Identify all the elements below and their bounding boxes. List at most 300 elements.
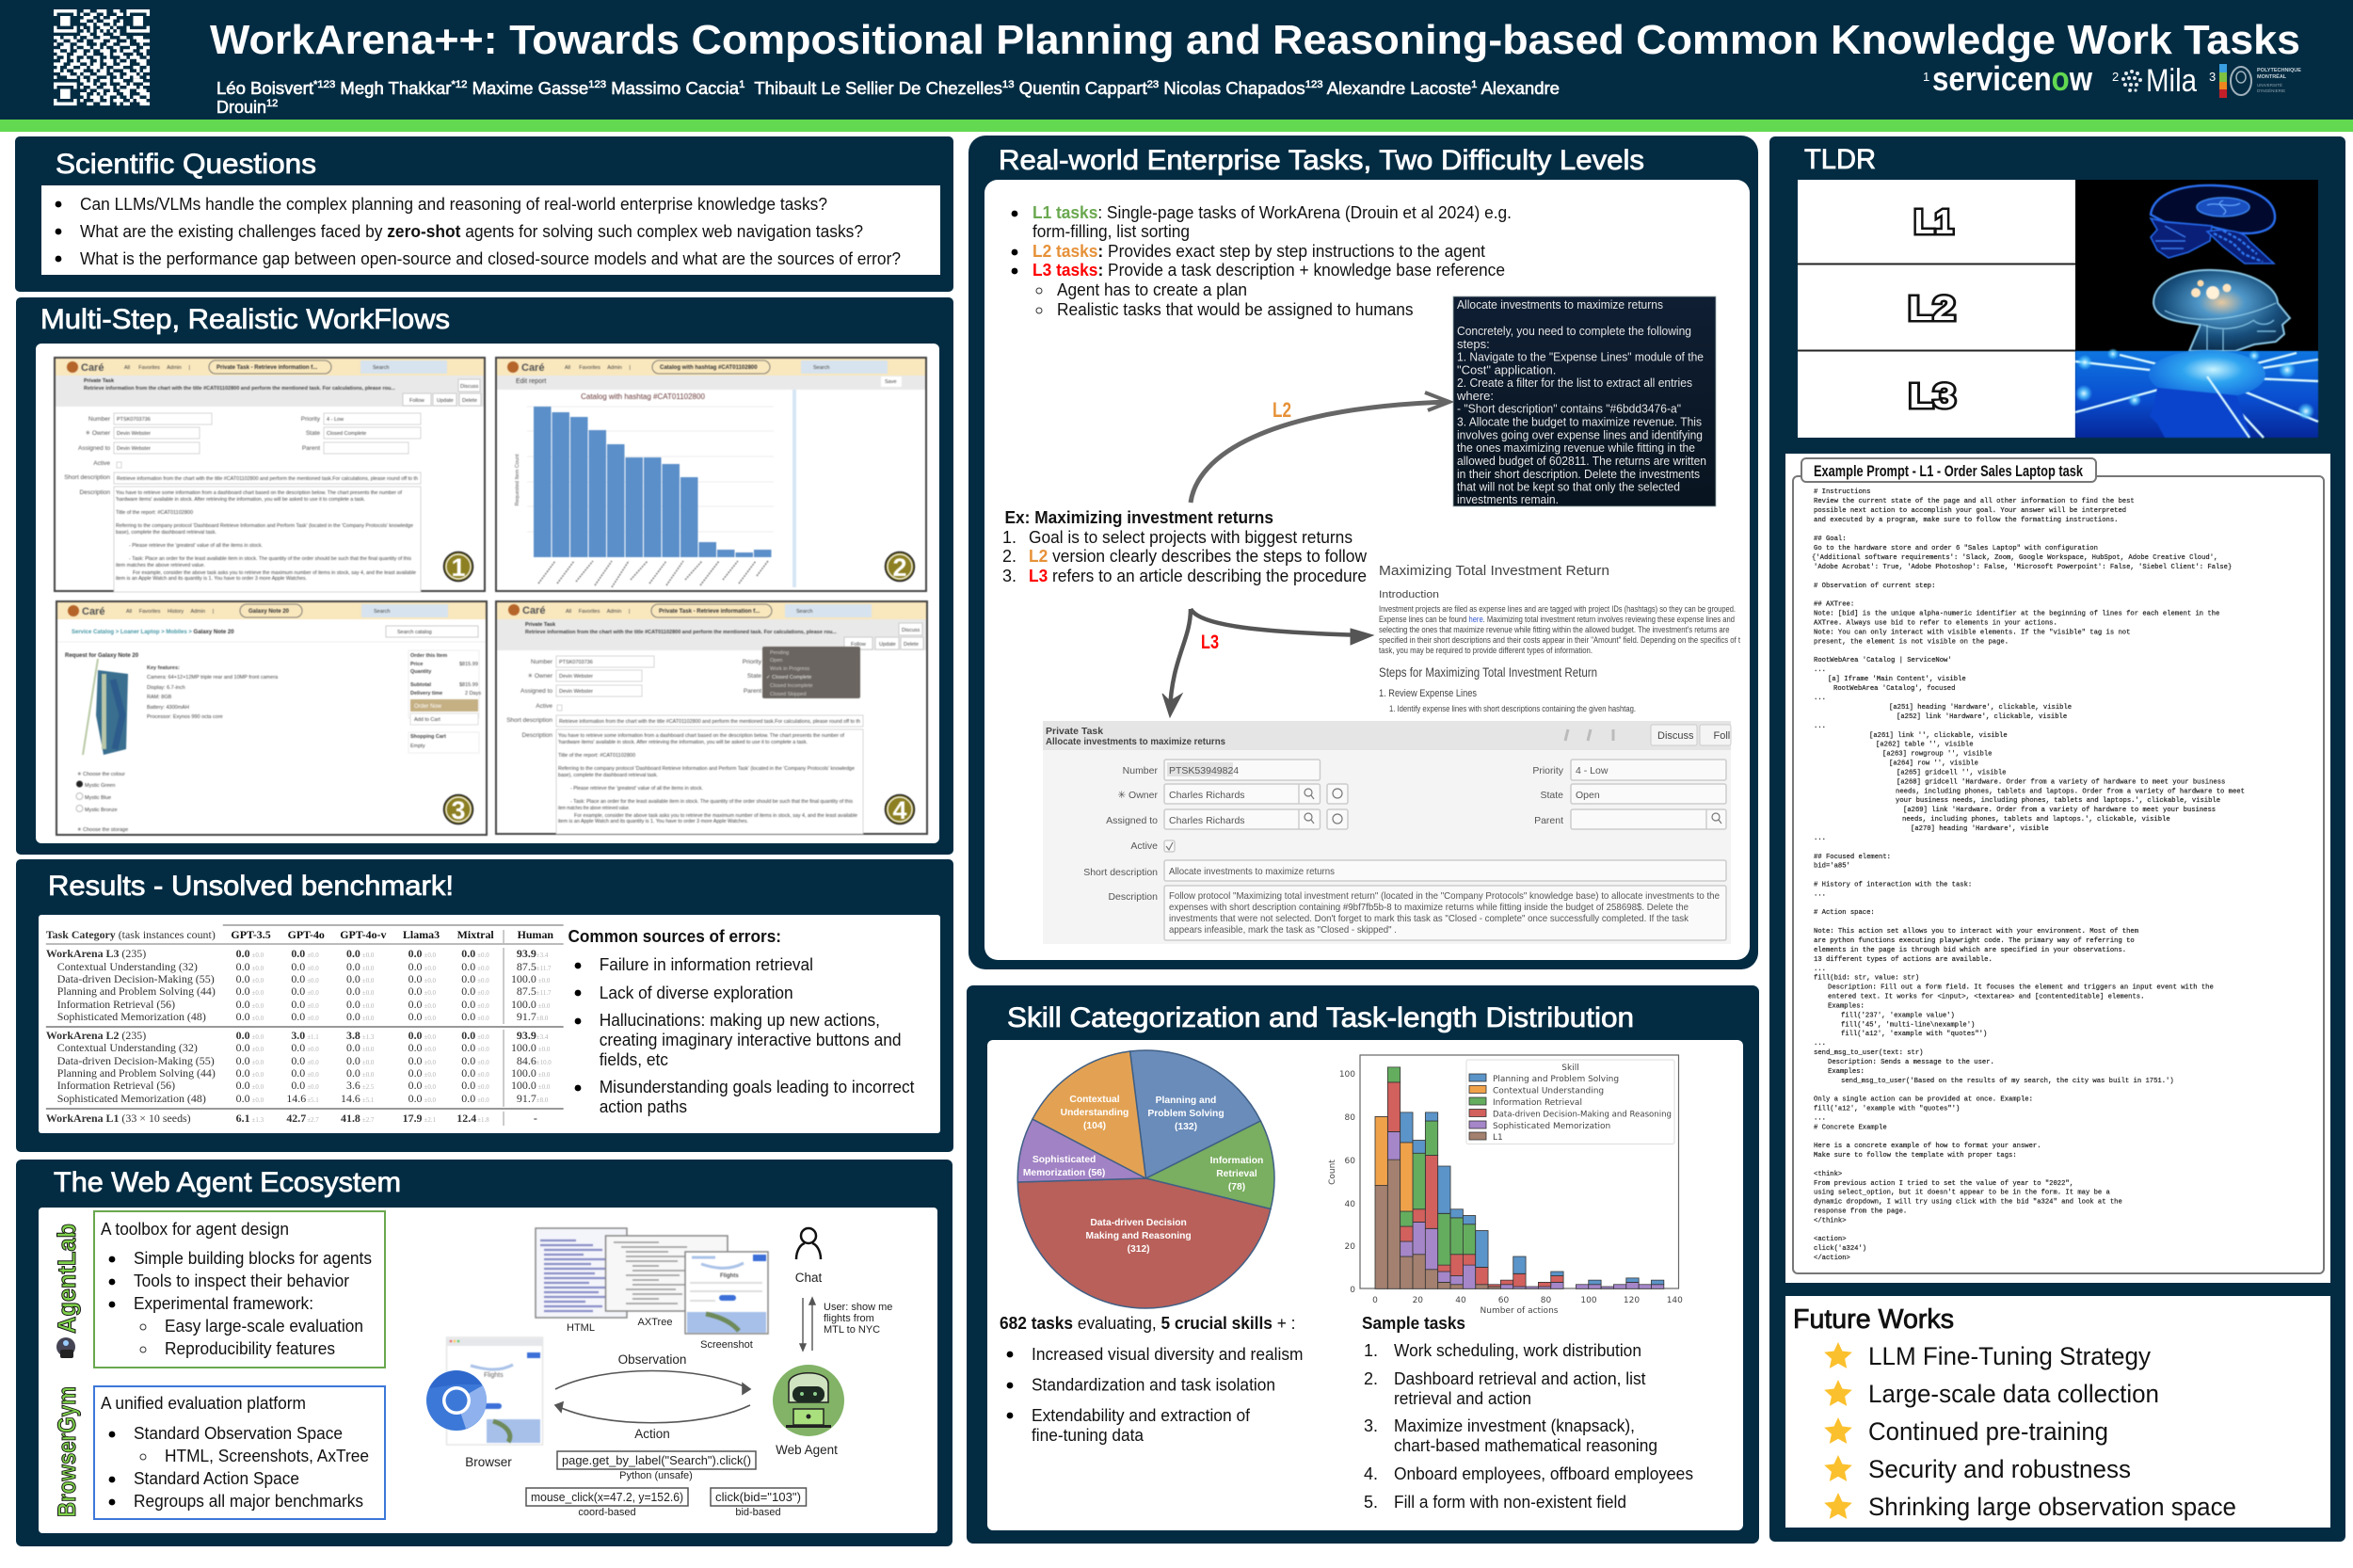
screenshot 4: state dropdown: Devin Webster [559,689,593,695]
results table: 0.0 [236,960,250,973]
results table: ±2.7 [362,1116,375,1124]
screenshot 4: state dropdown: Assigned to [520,688,552,695]
authors: Nicolas Chapados [1159,79,1305,98]
knowledge base article [1379,563,1740,713]
results table: ±0.0 [252,1002,264,1010]
results table: Data-driven Decision-Making (55) [57,1054,215,1067]
results table: 0.0 [291,1041,305,1054]
knowledge base article: Maximizing Total Investment Return [1379,563,1609,579]
diagram: agent environment loop: User: show me [824,1302,892,1313]
authors: 123 [588,79,606,90]
knowledge base article: Steps for Maximizing Total Investment Return [1379,664,1597,680]
legend: Information Retrieval [1493,1098,1582,1108]
prompt text: fill('a12', 'example with "quotes"') [1841,1031,1987,1038]
prompt text: send_msg_to_user(text: str) [1814,1049,1923,1057]
screenshot 4: state dropdown: - Please retrieve the 'greatest' value of all the items in stock. [570,786,703,792]
histogram: 120 [1624,1296,1640,1305]
question list: What are the existing challenges faced by zero-shot agents for solving such complex web navigation tasks? [80,222,863,241]
authors: Léo Boisvert [216,79,311,98]
screenshot 3: product catalog: Mystic Blue [85,795,111,801]
box: browsergym platform: Standard Action Space [134,1469,299,1488]
prompt text: ... [1814,1114,1826,1122]
histogram: 100 [1339,1070,1355,1080]
screenshot 1: private task form: Devin Webster [117,431,151,437]
results table: ±8.0 [536,1015,549,1022]
results table: 0.0 [236,1054,250,1067]
arrow: action [555,1402,750,1423]
affiliation logos: 1 [1923,70,1929,84]
future works box [1785,1296,2330,1528]
screenshot 4: state dropdown: Active [536,703,552,710]
affiliation logos: POLYTECHNIQUE [2257,68,2301,73]
results table: ±0.0 [307,1015,319,1022]
prompt text: fill('45', 'multi-line\nexample') [1841,1022,1975,1030]
results table: 3.8 [346,1029,360,1042]
example task text: 3. [1002,567,1016,585]
results table: 0.0 [461,960,475,973]
results table: ±0.0 [307,1046,319,1053]
results table: 0.0 [291,1010,305,1023]
screenshot 2: bar chart report: Save [885,379,897,385]
results table: ±0.0 [252,965,264,972]
screenshot 4: state dropdown: item matches the above retrieved value. [558,806,630,811]
icon: chrome logo [426,1370,487,1431]
results table [46,925,564,1126]
results table: Sophisticated Memorization (48) [57,1010,206,1023]
task level list: L2 tasks: Provides exact step by step instructions to the agent [1032,242,1485,261]
results table: 87.5 [517,960,536,973]
servicenow form screenshot: PTSK53949824 [1169,765,1239,776]
affiliation logos [1923,59,2301,99]
results table: ±0.0 [362,977,375,984]
results table: ±1.3 [362,1033,375,1041]
title: WorkArena++: Towards Compositional Planning and Reasoning-based Common Knowledge Work Tasks [210,17,2300,63]
servicenow form screenshot: Follow protocol "Maximizing total investment return" (located in the "Company Protocols" knowledge base) to allocate investments to the [1169,890,1720,902]
results table: Human [518,928,553,941]
galaxy brain meme: L2 [1909,289,1956,328]
results table: ±0.0 [477,1002,489,1010]
example task text: Ex: Maximizing investment returns [1005,508,1273,527]
legend: L1 [1493,1133,1503,1143]
prompt text: and executed by a program, make sure to follow the formatting instructions. [1814,517,2118,524]
example task text: Goal is to select projects with biggest returns [1029,528,1353,547]
servicenow form screenshot: expenses with short description containing #9bf7fb5b-8 to maximize returns while fitting inside the budget of 258698$. Delete the [1169,902,1689,913]
results table: ±0.0 [477,1046,489,1053]
authors: 13 [1002,79,1015,90]
brain L2 [2153,270,2290,351]
results table: 0.0 [291,960,305,973]
sample tasks: 2. [1364,1369,1378,1388]
results table: ±0.0 [307,1059,319,1066]
screenshot 2: bar chart report: Catalog with hashtag #CAT01102800 [660,365,758,371]
results table: ±0.0 [252,1015,264,1022]
L2 instruction box: investments remain. [1457,492,1559,506]
future works box: Large-scale data collection [1868,1380,2159,1408]
screenshot 3: product catalog: Quantity [410,669,432,675]
authors [216,79,1560,117]
servicenow form screenshot: Description [1108,891,1158,903]
screenshot 1: private task form: item matches the above retrieved value. [116,563,205,568]
future works box: Security and robustness [1868,1455,2131,1483]
results table: ±0.0 [477,1096,489,1104]
prompt text: fill('237', 'example value') [1841,1013,1955,1020]
screenshot 1: private task form: Assigned to [78,445,110,452]
screenshot 1: private task form: 4 - Low [327,417,344,423]
screenshot 3: product catalog: Order this Item [410,653,447,659]
screenshot 1: private task form: For example, consider the above task asks you to retrieve the maximum number of items in stock, say 4, and the least available [133,570,416,576]
results table: ±0.0 [362,1015,375,1022]
results table: 0.0 [236,1029,250,1042]
screenshot 3: product catalog: Key features: [147,665,180,671]
results table: ±0.0 [362,989,375,997]
results table: ±0.0 [362,965,375,972]
diagram: agent environment loop: Action [634,1427,670,1441]
results table: 3.6 [346,1079,360,1092]
screenshot 4: state dropdown: Devin Webster [559,674,593,680]
histogram: 140 [1667,1296,1683,1305]
prompt text: possible next action to accomplish your goal. Your answer will be interpreted [1814,507,2126,515]
code: bid action [711,1488,806,1506]
servicenow form screenshot: Open [1576,790,1600,801]
results table: 0.0 [461,1041,475,1054]
diagram: agent environment loop: Python (unsafe) [619,1470,693,1481]
results table: Llama3 [403,928,440,941]
results table: 0.0 [408,1041,423,1054]
sample tasks: Fill a form with non-existent field [1394,1493,1626,1512]
results table: ±0.0 [424,1059,437,1066]
browser window: Flights [484,1372,504,1379]
prompt text: ... [1814,695,1826,702]
authors: Drouin [216,98,266,117]
prompt text: dynamic dropdown, I will try using click with the bid "a324" and look at the [1814,1199,2122,1207]
screenshot 3: product catalog: Caré [82,606,104,617]
logo: AgentLab: AgentLab [53,1224,81,1334]
prompt text: ## Goal: [1814,536,1847,543]
brain L1 [2151,185,2275,264]
results table: ±2.5 [362,1083,375,1091]
screenshot 1: private task form: Description [79,489,110,496]
results table: ±0.0 [424,965,437,972]
results table: ±0.0 [307,1071,319,1079]
pie chart: Understanding [1061,1108,1128,1118]
screenshot 1: private task form: Active [93,460,110,467]
prompt text: response from the page. [1814,1208,1907,1216]
L2 instruction box: Concretely, you need to complete the following [1457,324,1691,338]
results table: 0.0 [236,1092,250,1105]
box: agentlab toolbox: A toolbox for agent design [101,1220,289,1239]
prompt text: # Instructions [1814,488,1870,496]
screenshot 1: private task form: PTSK0703736 [117,417,151,423]
future works box: Future Works [1793,1304,1954,1335]
heading: Scientific Questions [56,149,316,180]
results table: ±11.7 [536,965,552,972]
prompt text: [a263] rowgroup '', visible [1882,751,1992,759]
prompt text: Make sure to follow the template with proper tags: [1814,1152,2017,1160]
pie chart: (104) [1083,1121,1106,1131]
results table: 0.0 [346,972,360,985]
screenshot 3: product catalog: Request for Galaxy Note 20 [65,653,139,659]
heading: Results - Unsolved benchmark! [48,871,454,902]
prompt text: Description: Sends a message to the user. [1828,1059,1994,1066]
arrow: chat exchange [800,1298,815,1351]
prompt text: [a265] gridcell '', visible [1897,770,2006,777]
results table: 84.6 [517,1054,536,1067]
results table: Contextual Understanding (32) [57,1041,198,1054]
servicenow form screenshot: Private Task [1046,726,1103,737]
results table: ±0.0 [477,1015,489,1022]
results table: ±0.0 [362,952,375,959]
header banner [0,0,2353,132]
screenshot 4: state dropdown: Short description [506,717,552,724]
screenshot 4: state dropdown: 'hardware items' available in stock. After retrieving the information, you will be asked to use it to complete a task. [558,740,808,745]
sample tasks: 3. [1364,1416,1378,1435]
histogram [1328,1055,1683,1316]
pie chart: Sophisticated [1032,1155,1096,1165]
panel: real-world enterprise tasks [968,136,1758,969]
results table: ±0.0 [477,977,489,984]
screenshot 1: private task form: Priority [301,416,321,423]
question list: Can LLMs/VLMs handle the complex planning and reasoning of real-world enterprise knowledge tasks? [80,195,827,214]
prompt text: ## Focused element: [1814,854,1891,861]
screenshot 1: private task form: Number [88,416,111,423]
results table: ±0.0 [307,952,319,959]
results table: 41.8 [341,1112,360,1125]
screenshot 3: product catalog: Battery: 4300mAH [147,705,189,711]
results table: 0.0 [236,1010,250,1023]
results table: Task Category (task instances count) [46,928,216,941]
results table: 0.0 [461,1010,475,1023]
L2 instruction box: 2. Create a filter for the list to extract all entries [1457,376,1692,390]
results table: 0.0 [408,947,423,960]
prompt text: 13 different types of actions are available. [1814,956,1993,964]
QR code [54,11,150,104]
sample tasks: 4. [1364,1464,1378,1483]
results table: ±1.3 [252,1116,264,1124]
prompt text: # Observation of current step: [1814,583,1935,590]
example prompt box [1785,454,2330,1283]
screenshot 2: bar chart report: Caré [521,362,544,374]
screenshot 3: product catalog: ✳ Choose the storage [77,826,128,833]
histogram: 40 [1455,1296,1466,1305]
code: python action: page.get_by_label("Search").click() [562,1453,751,1467]
results table: ±2.1 [424,1116,437,1124]
prompt text: [a270] heading 'Hardware', visible [1911,825,2049,833]
results table: ±0.0 [307,965,319,972]
prompt text: Examples: [1828,1068,1865,1076]
screenshot 2: bar chart report: Requested Item Count [515,454,520,506]
state dropdown: Closed Skipped [770,692,807,697]
results table: 0.0 [291,947,305,960]
observation documents: Flights [720,1273,739,1279]
icon: chat user [796,1228,821,1259]
state dropdown: Work in Progress [770,666,809,672]
prompt text: [a252] link 'Hardware', clickable, visible [1897,713,2067,721]
results table: 87.5 [517,984,536,998]
box: agentlab toolbox: Easy large-scale evaluation [165,1317,363,1336]
state dropdown: Open [770,658,782,664]
histogram: 0 [1372,1296,1378,1305]
L2 instruction box: - "Short description" contains "#6bdd3476-a" [1457,401,1681,416]
screenshot 3: product catalog: Empty [410,744,425,749]
results table: ±5.1 [307,1096,319,1104]
heading: Multi-Step, Realistic WorkFlows [40,304,450,335]
step badge 3: 3 [451,796,466,824]
legend: Contextual Understanding [1493,1086,1604,1096]
common sources of errors: Hallucinations: making up new actions, [600,1011,880,1030]
screenshot 3: product catalog [56,601,487,835]
prompt text: ## AXTree: [1814,600,1854,608]
results table: 0.0 [408,1029,423,1042]
screenshot 3: product catalog: Shopping Cart [410,734,446,740]
box: browsergym platform: Standard Observation Space [134,1424,343,1443]
diagram: agent environment loop: AXTree [638,1317,672,1328]
diagram: agent environment loop: HTML [567,1322,595,1334]
prompt text: {'Additional software requirements': 'Slack, Zoom, Google Workspace, HubSpot, Adobe Creative Cloud', [1812,554,2217,562]
pie chart: Retrieval [1216,1169,1257,1179]
prompt text: entered text. It works for <input>, <textarea> and [contenteditable] elements. [1828,994,2144,1001]
results table: 6.1 [236,1112,250,1125]
results table: 14.6 [286,1092,306,1105]
results table: ±1.8 [477,1116,489,1124]
screenshot 1: private task form: Retrieve information from the chart with the title #CAT01102800 and perform the mentioned task. For calculations, please rou... [84,386,395,392]
prompt text: </think> [1814,1218,1847,1225]
servicenow form screenshot: Foll [1713,730,1730,742]
step badge 4: 4 [892,796,907,824]
results table: ±0.0 [362,1071,375,1079]
legend: Planning and Problem Solving [1493,1075,1619,1084]
authors: Thibault Le Sellier De Chezelles [744,79,1002,98]
example task text [1002,508,1368,585]
screenshot 4: state dropdown [496,601,927,834]
prompt text: ... [1814,723,1826,730]
prompt text: are python functions executing playwright code. The primary way of referring to [1814,937,2135,945]
servicenow form screenshot: Active [1130,840,1158,852]
results table: ±0.0 [538,1083,551,1091]
results table: 14.6 [341,1092,360,1105]
screenshot 4: state dropdown: Parent [744,688,761,695]
histogram: 40 [1345,1200,1355,1209]
box: agentlab toolbox: Simple building blocks for agents [134,1249,372,1268]
results table: 0.0 [408,1092,423,1105]
results table: 0.0 [346,1010,360,1023]
screenshot 3: product catalog: Display: 6.7-inch [147,685,185,691]
results table: - [534,1112,537,1125]
prompt text: 'Adobe Acrobat': True, 'Adobe Photoshop': False, 'Microsoft Powerpoint': False, 'Siebel Client': False} [1814,564,2232,571]
results table: 91.7 [517,1010,536,1023]
results table: WorkArena L2 (235) [46,1029,146,1042]
star list [1824,1342,1852,1519]
results table: 0.0 [291,984,305,998]
arrow: L2 [1191,392,1449,503]
sample tasks: Maximize investment (knapsack), [1394,1416,1635,1435]
prompt text: [a261] link '', clickable, visible [1869,732,2008,740]
diagram: agent environment loop: coord-based [578,1507,636,1518]
heading: Real-world Enterprise Tasks, Two Difficulty Levels [999,145,1644,176]
knowledge base article: specified in their short descriptions and their costs appear in their "Amount" field. Depending on the specifics of t [1379,635,1740,645]
screenshot 4: state dropdown: All Favorites Admin | [566,609,630,615]
prompt text: send_msg_to_user('Based on the results of my search, the city was built in 1751.') [1841,1078,2174,1085]
galaxy brain meme: L3 [1909,376,1956,415]
results table: 0.0 [291,972,305,985]
affiliation logos: servicenow [1932,59,2093,98]
screenshot 4: state dropdown: Delete [904,642,919,648]
pie chart: Information [1210,1156,1263,1166]
prompt text: using select_option, but it doesn't appear to be in the form. It may be a [1814,1190,2111,1197]
sample tasks: 1. [1364,1341,1378,1360]
results table: Information Retrieval (56) [57,998,175,1011]
prompt text: [a262] table '', visible [1876,742,1974,749]
common sources of errors [568,927,915,1116]
legend: Sophisticated Memorization [1493,1122,1610,1131]
results table: 0.0 [236,998,250,1011]
knowledge base article: 1. Review Expense Lines [1379,688,1477,699]
prompt text: Note: [bid] is the unique alpha-numeric identifier at the beginning of lines for each element in the [1814,610,2219,617]
pie chart: (312) [1128,1244,1150,1255]
screenshot 4: state dropdown: item is an Apple Watch and its quantity is 1. You have to order 3 more Apple Watches. [558,819,748,824]
results table: ±5.1 [362,1096,375,1104]
results table: 0.0 [346,984,360,998]
screenshot 1: private task form: Private Task - Retrieve information f... [216,365,318,371]
authors: Maxime Gasse [467,79,588,98]
example task text: L3 refers to an article describing the procedure [1029,567,1367,585]
L2 instruction box: 3. Allocate the budget to maximize revenue. This [1457,414,1702,429]
results table: ±0.0 [307,1002,319,1010]
code: coordinate action: mouse_click(x=47.2, y=152.6) [531,1490,683,1504]
servicenow form screenshot: State [1540,790,1563,801]
diagram: agent environment loop [426,1228,892,1518]
results table: 0.0 [346,960,360,973]
results table: 100.0 [511,1041,536,1054]
results table: ±10.0 [536,1059,552,1066]
results table: ±0.0 [252,1046,264,1053]
screenshot 1: private task form: State [306,430,320,437]
results table: 0.0 [291,998,305,1011]
servicenow form screenshot: appears infeasible, mark the task as "Closed - skipped" . [1169,924,1397,936]
step badge 1: 1 [451,553,466,582]
common sources of errors: Common sources of errors: [568,927,781,946]
screenshot 1: private task form [55,358,485,592]
L2 instruction box: Allocate investments to maximize returns [1457,297,1663,312]
diagram: agent environment loop: MTL to NYC [824,1324,880,1336]
screenshot 4: state dropdown: Retrieve information from the chart with the title #CAT01102800 and perform the mentioned task.For calculations, please round off to th [559,719,860,725]
results table: ±11.7 [536,989,552,997]
screenshot 1: private task form: ✳ Owner [86,429,111,437]
screenshot 3: product catalog: Search [374,609,390,615]
prompt text: AXTree. Always use bid to refer to elements in your actions. [1814,619,2057,627]
screenshot 3: product catalog: Galaxy Note 20 [248,609,290,615]
servicenow form screenshot: Assigned to [1106,815,1158,826]
pie chart: Planning and [1156,1096,1216,1106]
results table: 0.0 [408,1066,423,1080]
screenshot 3: product catalog: Subtotal [410,682,431,688]
results table: GPT-4o-v [340,928,387,941]
results table: 0.0 [408,984,423,998]
pie chart: Contextual [1069,1095,1120,1105]
screenshot 4: state dropdown: ✳ Owner [528,672,553,680]
screenshot 1: private task form: Short description [64,474,110,481]
results table: Data-driven Decision-Making (55) [57,972,215,985]
sample tasks: Sample tasks [1362,1314,1465,1333]
results table: ±0.0 [424,1096,437,1104]
box: browsergym platform: HTML, Screenshots, AxTree [165,1447,369,1465]
screenshot 3: product catalog: ✳ Choose the colour [77,771,125,777]
sample tasks: retrieval and action [1394,1389,1531,1408]
results table: ±1.1 [307,1033,319,1041]
results table: Sophisticated Memorization (48) [57,1092,206,1105]
phone image [83,659,128,755]
results table: Information Retrieval (56) [57,1079,175,1092]
results table: ±0.0 [424,989,437,997]
